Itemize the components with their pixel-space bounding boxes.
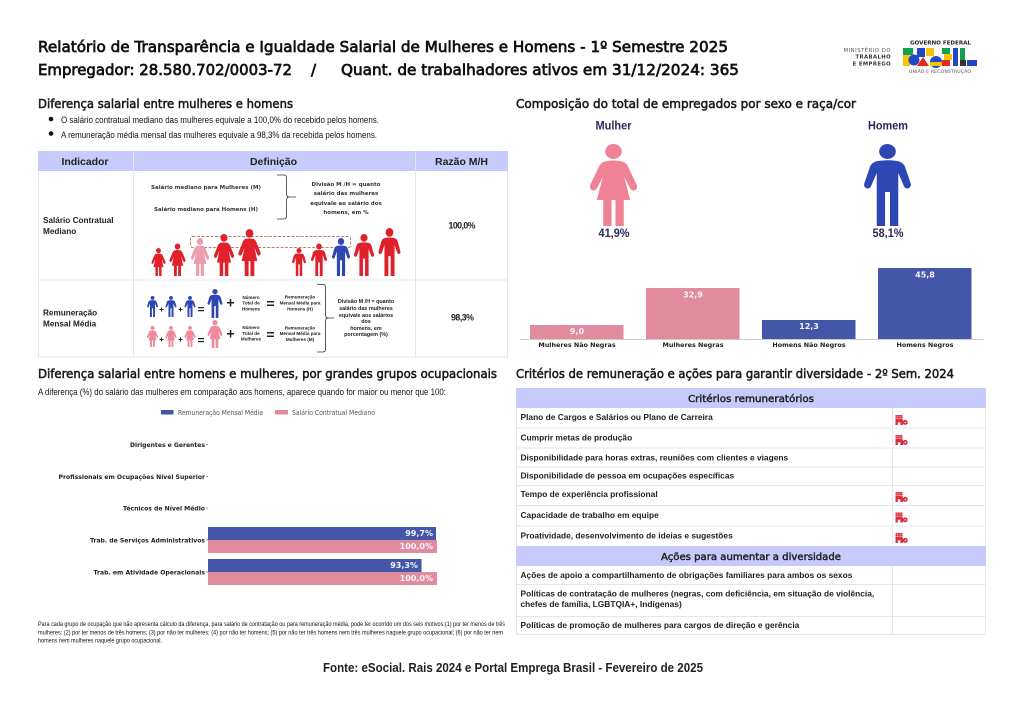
logo: ministério e governo federal: MINISTÉRIO DO <box>844 46 891 54</box>
category labels: Dirigentes e Gerentes <box>130 441 205 449</box>
legend: Salário Contratual Mediano <box>292 409 375 417</box>
definition: remuneração mensal média: homens, em <box>350 326 382 332</box>
logo: ministério e governo federal: E EMPREGO <box>853 62 891 68</box>
row: proatividade <box>520 530 907 543</box>
value: 100,0%: 100,0% <box>448 220 476 230</box>
row: plano de cargos <box>520 412 907 425</box>
bar: mulheres negras: Mulheres Negras <box>662 341 724 349</box>
logo: ministério e governo federal: UNIÃO E RECONSTRUÇÃO <box>909 68 971 75</box>
source: Fonte: eSocial. Rais 2024 e Portal Emprega Brasil - Fevereiro de 2025 <box>323 661 703 675</box>
footnote: mulheres; (2) por ter menos de três homens; (3) por não ter mulheres; (4) por não ter homens; (5) por não ter três homens nem três mulheres naquele grupo ocupacional; (6) por não ter nem <box>38 630 503 636</box>
definition: remuneração mensal média: Remuneração <box>285 326 315 330</box>
bar chart: sexo e raça/cor <box>520 268 983 349</box>
bar: mulheres não negras <box>530 325 624 349</box>
definition: remuneração mensal média: Número <box>242 325 260 330</box>
title: Relatório de Transparência e Igualdade Salarial de Mulheres e Homens - 1º Semestre 2025 <box>38 38 728 56</box>
bar: homens não negros <box>762 320 856 349</box>
heading: grupos ocupacionais: Diferença salarial entre homens e mulheres, por grandes grupos ocupacionais <box>38 366 497 381</box>
definition: salário contratual mediano <box>151 175 383 219</box>
legend: Remuneração Mensal Média <box>178 409 263 417</box>
logo: ministério e governo federal <box>844 40 977 75</box>
definition: remuneração mensal média: Mensal Média para <box>280 331 321 336</box>
legend <box>161 409 375 417</box>
bar: mulheres negras: 32,9 <box>683 290 703 300</box>
definition: remuneração mensal média: dos <box>361 319 371 325</box>
definition: remuneração mensal média: Mulheres <box>241 336 262 342</box>
definition: remuneração mensal média: equivale aos salários <box>339 313 393 319</box>
definition: salário contratual mediano: equivale ao salário dos <box>310 200 383 207</box>
bar: mulheres não negras: 9,0 <box>570 327 585 336</box>
definition: remuneração mensal média: Homens <box>242 306 261 312</box>
category labels: Profissionais em Ocupações Nível Superior <box>58 473 206 481</box>
category labels: Trab. em Atividade Operacionais <box>94 568 205 576</box>
logo: ministério e governo federal: TRABALHO <box>856 54 891 60</box>
table header: Indicador <box>62 156 108 168</box>
header: critérios remuneratórios: Critérios remuneratórios <box>688 393 814 405</box>
pictogram: salários em ordem <box>151 228 400 276</box>
title: Empregador: 28.580.702/0003-72 <box>38 61 292 79</box>
row: políticas de contratação: chefes de família, LGBTQIA+, Indígenas) <box>520 599 682 609</box>
title <box>38 38 739 79</box>
table header: Razão M/H <box>435 156 488 168</box>
definition: remuneração mensal média: salário das mulheres <box>339 306 393 312</box>
bars: trab. em atividade operacionais: 93,3% <box>390 561 418 570</box>
bar: mulheres não negras: Mulheres Não Negras <box>538 341 616 349</box>
definition: remuneração mensal média: Divisão M /H = quanto <box>338 299 395 305</box>
definition: remuneração mensal média: Total de <box>242 300 260 306</box>
row: metas <box>520 432 907 445</box>
row label: remuneração mensal média: Mensal Média <box>43 320 97 328</box>
row: políticas de contratação: Políticas de contratação de mulheres (negras, com deficiência, em situação de violência, <box>520 588 874 598</box>
footnote: homens nem mulheres naquele grupo ocupacional. <box>38 638 162 644</box>
row: horas extras: Disponibilidade para horas extras, reuniões com clientes e viagens <box>520 452 788 462</box>
definition: salário contratual mediano: salário das mulheres <box>314 190 379 197</box>
definition: salário contratual mediano: homens, em % <box>323 210 369 216</box>
bar: homens negros: 45,8 <box>915 270 935 280</box>
definition: remuneração mensal média <box>147 284 395 352</box>
logo: ministério e governo federal: GOVERNO FEDERAL <box>910 40 971 46</box>
heading: composição: Composição do total de empregados por sexo e raça/cor <box>516 96 857 111</box>
bars: trab. de serviços administrativos: 100,0% <box>400 542 433 551</box>
bars: trab. em atividade operacionais: 100,0% <box>400 574 433 583</box>
definition: remuneração mensal média: Número <box>242 295 260 300</box>
row: capacidade de trabalho <box>520 510 907 522</box>
definition: remuneração mensal média: Homens (H) <box>287 306 313 312</box>
row: ocupações específicas: Disponibilidade de pessoa em ocupações específicas <box>520 470 734 480</box>
bar chart: grupos ocupacionais <box>58 441 437 585</box>
bullet list: A remuneração média mensal das mulheres equivale a 98,3% da recebida pelos homens. <box>61 130 377 141</box>
figure: homem <box>864 118 911 240</box>
bar: mulheres negras <box>646 288 740 349</box>
row label: salário contratual mediano: Mediano <box>43 227 76 236</box>
row label: salário contratual mediano: Salário Contratual <box>43 216 114 225</box>
figure: homem: Homem <box>868 118 908 132</box>
definition: salário contratual mediano: Salário mediano para Mulheres (M) <box>151 184 261 191</box>
bar: homens não negros: Homens Não Negros <box>772 341 846 349</box>
bars: trab. de serviços administrativos <box>208 527 437 553</box>
bar: homens não negros: 12,3 <box>799 322 819 331</box>
bar: homens negros: Homens Negros <box>897 341 954 349</box>
heading: diferença salarial entre mulheres e homens: Diferença salarial entre mulheres e homens <box>38 96 293 111</box>
row: tempo de experiência <box>520 489 907 502</box>
definition: salário contratual mediano: Salário mediano para Homens (H) <box>154 206 258 213</box>
category labels: Trab. de Serviços Administrativos <box>90 536 205 544</box>
row: apoio: Ações de apoio a compartilhamento de obrigações familiares para ambos os sexos <box>520 570 853 580</box>
category labels: Técnicos de Nível Médio <box>123 504 206 512</box>
definition: salário contratual mediano: Divisão M /H = quanto <box>312 182 381 188</box>
figure: homem: 58,1% <box>872 226 904 240</box>
bars: trab. de serviços administrativos: 99,7% <box>405 529 433 538</box>
panel: critérios e ações <box>516 388 986 635</box>
row: metas: Cumprir metas de produção <box>520 432 632 442</box>
header: ações: Ações para aumentar a diversidade <box>661 552 841 563</box>
bullet list: O salário contratual mediano das mulheres equivale a 100,0% do recebido pelos homens. <box>61 115 379 126</box>
row: capacidade de trabalho: Capacidade de trabalho em equipe <box>520 510 659 520</box>
row: promoção: Políticas de promoção de mulheres para cargos de direção e gerência <box>520 620 800 630</box>
header: critérios remuneratórios <box>516 388 986 408</box>
row: plano de cargos: Plano de Cargos e Salários ou Plano de Carreira <box>520 412 713 422</box>
title: / <box>311 61 317 79</box>
definition: remuneração mensal média: Mulheres (M) <box>286 337 315 342</box>
row label: remuneração mensal média: Remuneração <box>43 308 97 318</box>
table header: Definição <box>250 156 297 168</box>
bullet list <box>49 115 379 141</box>
figure: mulher: 41,9% <box>598 226 630 240</box>
footnote: Para cada grupo de ocupação que não apresenta cálculo da diferença, para salário de contratação ou para remuneração média, pode ter ocorrido um dos seis motivos:(1) por ter menos de três <box>38 621 506 628</box>
table header <box>38 151 508 171</box>
header: ações <box>516 546 986 566</box>
heading: critérios: Critérios de remuneração e ações para garantir diversidade - 2º Sem. 2024 <box>516 366 954 381</box>
definition: remuneração mensal média: porcentagem (%) <box>344 332 388 338</box>
figure: mulher <box>590 118 637 240</box>
footnote <box>38 621 506 644</box>
panel: tabela de indicadores <box>38 151 508 357</box>
category labels <box>58 441 206 576</box>
subtitle: grupos ocupacionais: A diferença (%) do salário das mulheres em comparação aos homens, aparece quando for maior ou menor que 100: <box>38 387 446 398</box>
figure: mulher: Mulher <box>596 118 632 132</box>
value: 98,3%: 98,3% <box>451 312 474 322</box>
row: proatividade: Proatividade, desenvolvimento de ideias e sugestões <box>520 530 733 540</box>
definition: remuneração mensal média: Total de <box>242 331 260 336</box>
title: Quant. de trabalhadores ativos em 31/12/2024: 365 <box>341 61 739 79</box>
definition: remuneração mensal média: Mensal Média para <box>280 300 321 306</box>
row: tempo de experiência: Tempo de experiência profissional <box>520 489 658 499</box>
bar: homens negros <box>878 268 972 349</box>
bars: trab. em atividade operacionais <box>208 559 437 585</box>
definition: remuneração mensal média: Remuneração <box>285 294 315 300</box>
